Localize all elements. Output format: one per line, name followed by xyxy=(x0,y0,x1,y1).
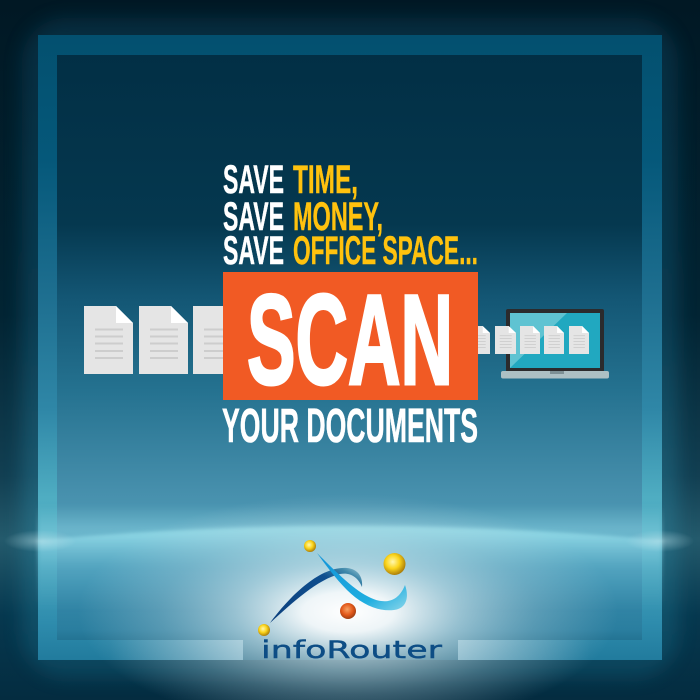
headline: save time, money, office space xyxy=(223,158,478,273)
icon: paper documents entering scanner xyxy=(84,306,242,374)
icon: laptop xyxy=(501,309,609,378)
headline: save time, money, office space: SAVE xyxy=(223,195,284,239)
icon: scanned documents xyxy=(469,326,589,354)
panel: scan banner xyxy=(223,269,478,412)
logo: infoRouter xyxy=(258,540,442,664)
subheading: your documents: YOUR DOCUMENTS xyxy=(222,400,478,453)
panel: inner background xyxy=(57,55,642,660)
headline: save time, money, office space: SAVE xyxy=(223,158,284,202)
headline: save time, money, office space: SAVE xyxy=(223,229,284,273)
headline: save time, money, office space: TIME, xyxy=(293,158,358,202)
headline: save time, money, office space: OFFICE SPACE... xyxy=(293,229,478,273)
panel: horizon glow xyxy=(4,494,694,700)
outer frame xyxy=(38,35,662,660)
headline: save time, money, office space: MONEY, xyxy=(293,195,383,239)
panel: scan banner: SCAN xyxy=(247,269,453,412)
logo: infoRouter: infoRouter xyxy=(261,636,442,664)
